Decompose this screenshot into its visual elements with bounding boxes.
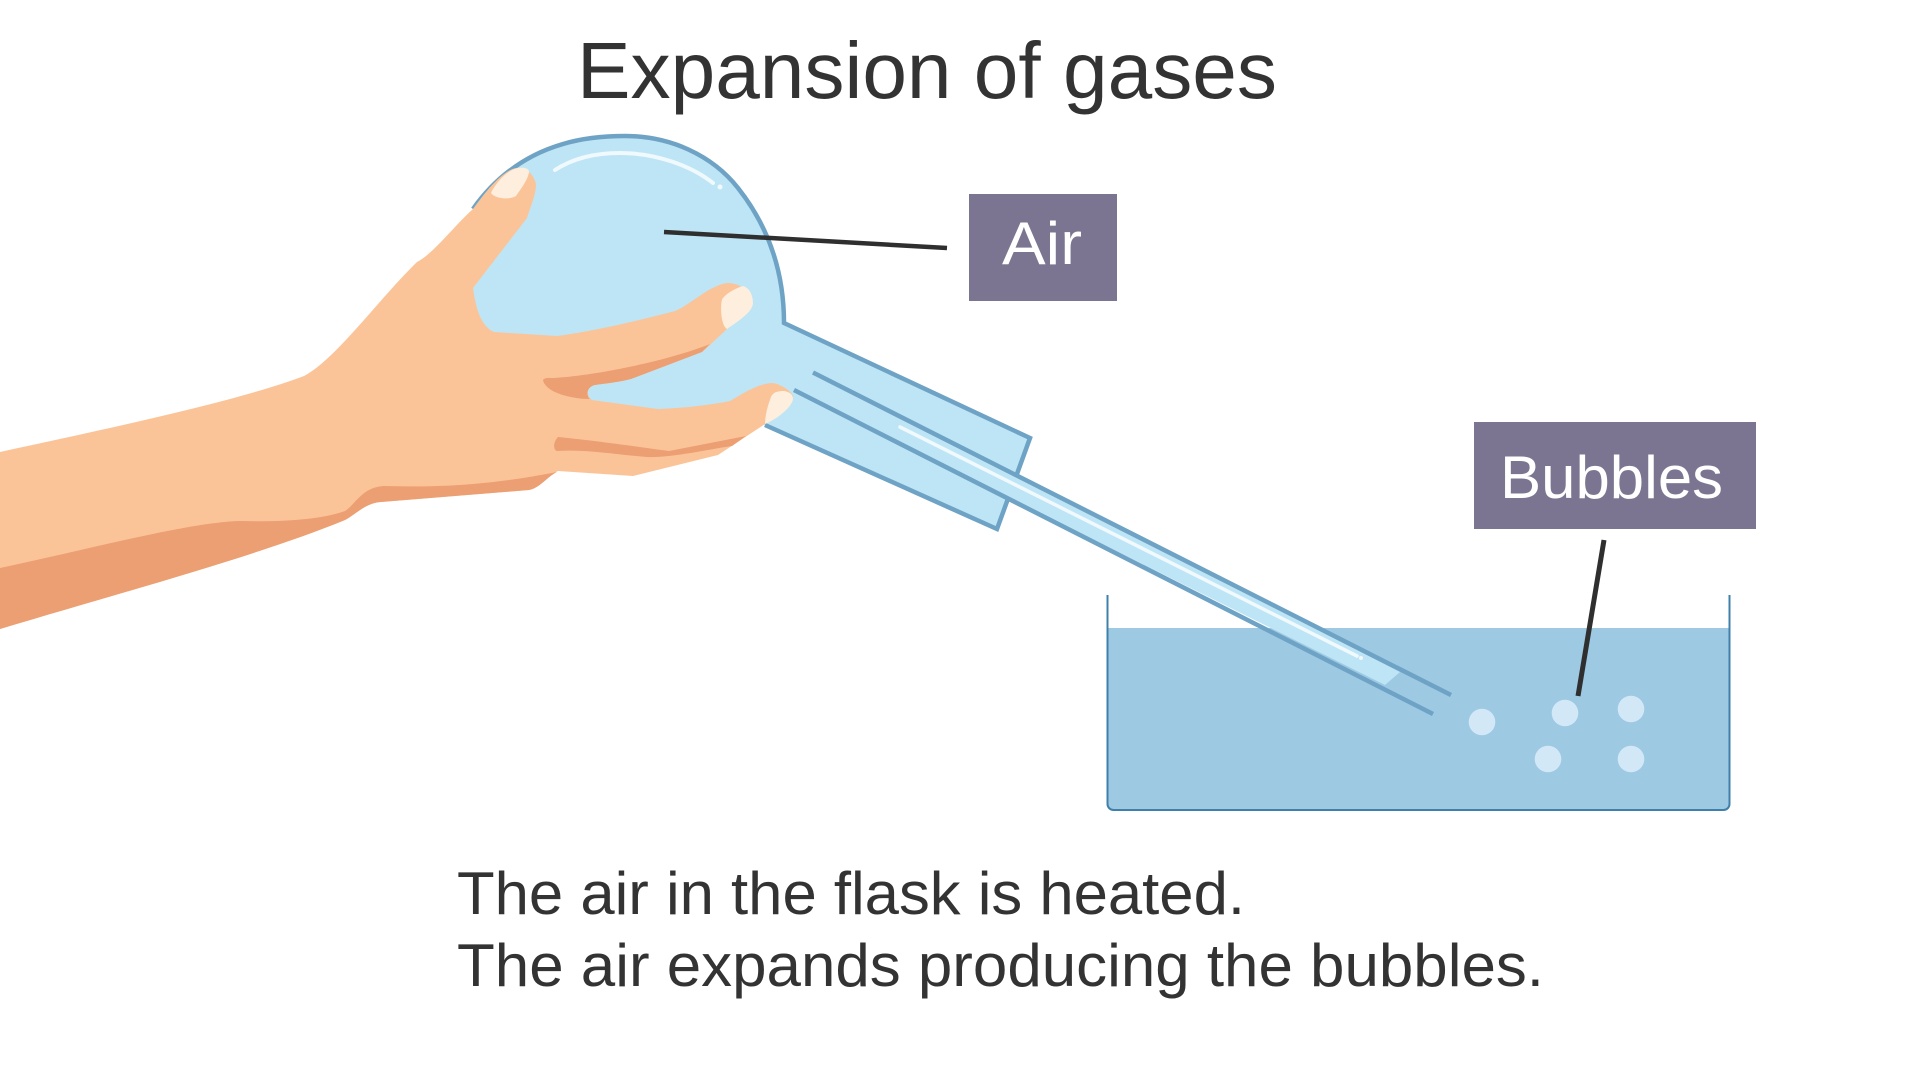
hand and forearm: [0, 168, 793, 629]
tube highlight dot: [1359, 656, 1363, 660]
tube walls: [794, 372, 1451, 714]
flask: [460, 136, 1030, 529]
flask outline: [473, 136, 1030, 529]
label: Air: [969, 194, 1117, 301]
explanation text: The air in the flask is heated.: [457, 860, 1245, 927]
delivery tube: [794, 372, 1451, 714]
beaker of water: [1108, 595, 1730, 810]
middle finger nail: [765, 391, 793, 424]
label: Bubbles: Bubbles: [1500, 444, 1723, 511]
thumb nail: [491, 168, 529, 198]
finger shadow lower: [554, 436, 746, 457]
title: Expansion of gases: [577, 26, 1277, 115]
glass highlight: [555, 153, 713, 183]
pointer line: air: [664, 232, 947, 248]
forearm shadow: [0, 472, 557, 629]
label: Air: Air: [1002, 210, 1082, 277]
hand holding the flask: [0, 168, 793, 629]
explanation text: [457, 860, 1544, 999]
tube fill: [794, 372, 1400, 685]
finger shadow upper: [543, 344, 710, 399]
bubbles: [1469, 696, 1644, 772]
pointer line: bubbles: [1578, 540, 1604, 696]
flask bulb and neck fill: [460, 136, 1030, 529]
index finger nail: [721, 286, 753, 329]
highlight dot: [718, 184, 722, 190]
tube highlight: [900, 427, 1357, 656]
explanation text: The air expands producing the bubbles.: [457, 932, 1544, 999]
label: Bubbles: [1474, 422, 1756, 529]
